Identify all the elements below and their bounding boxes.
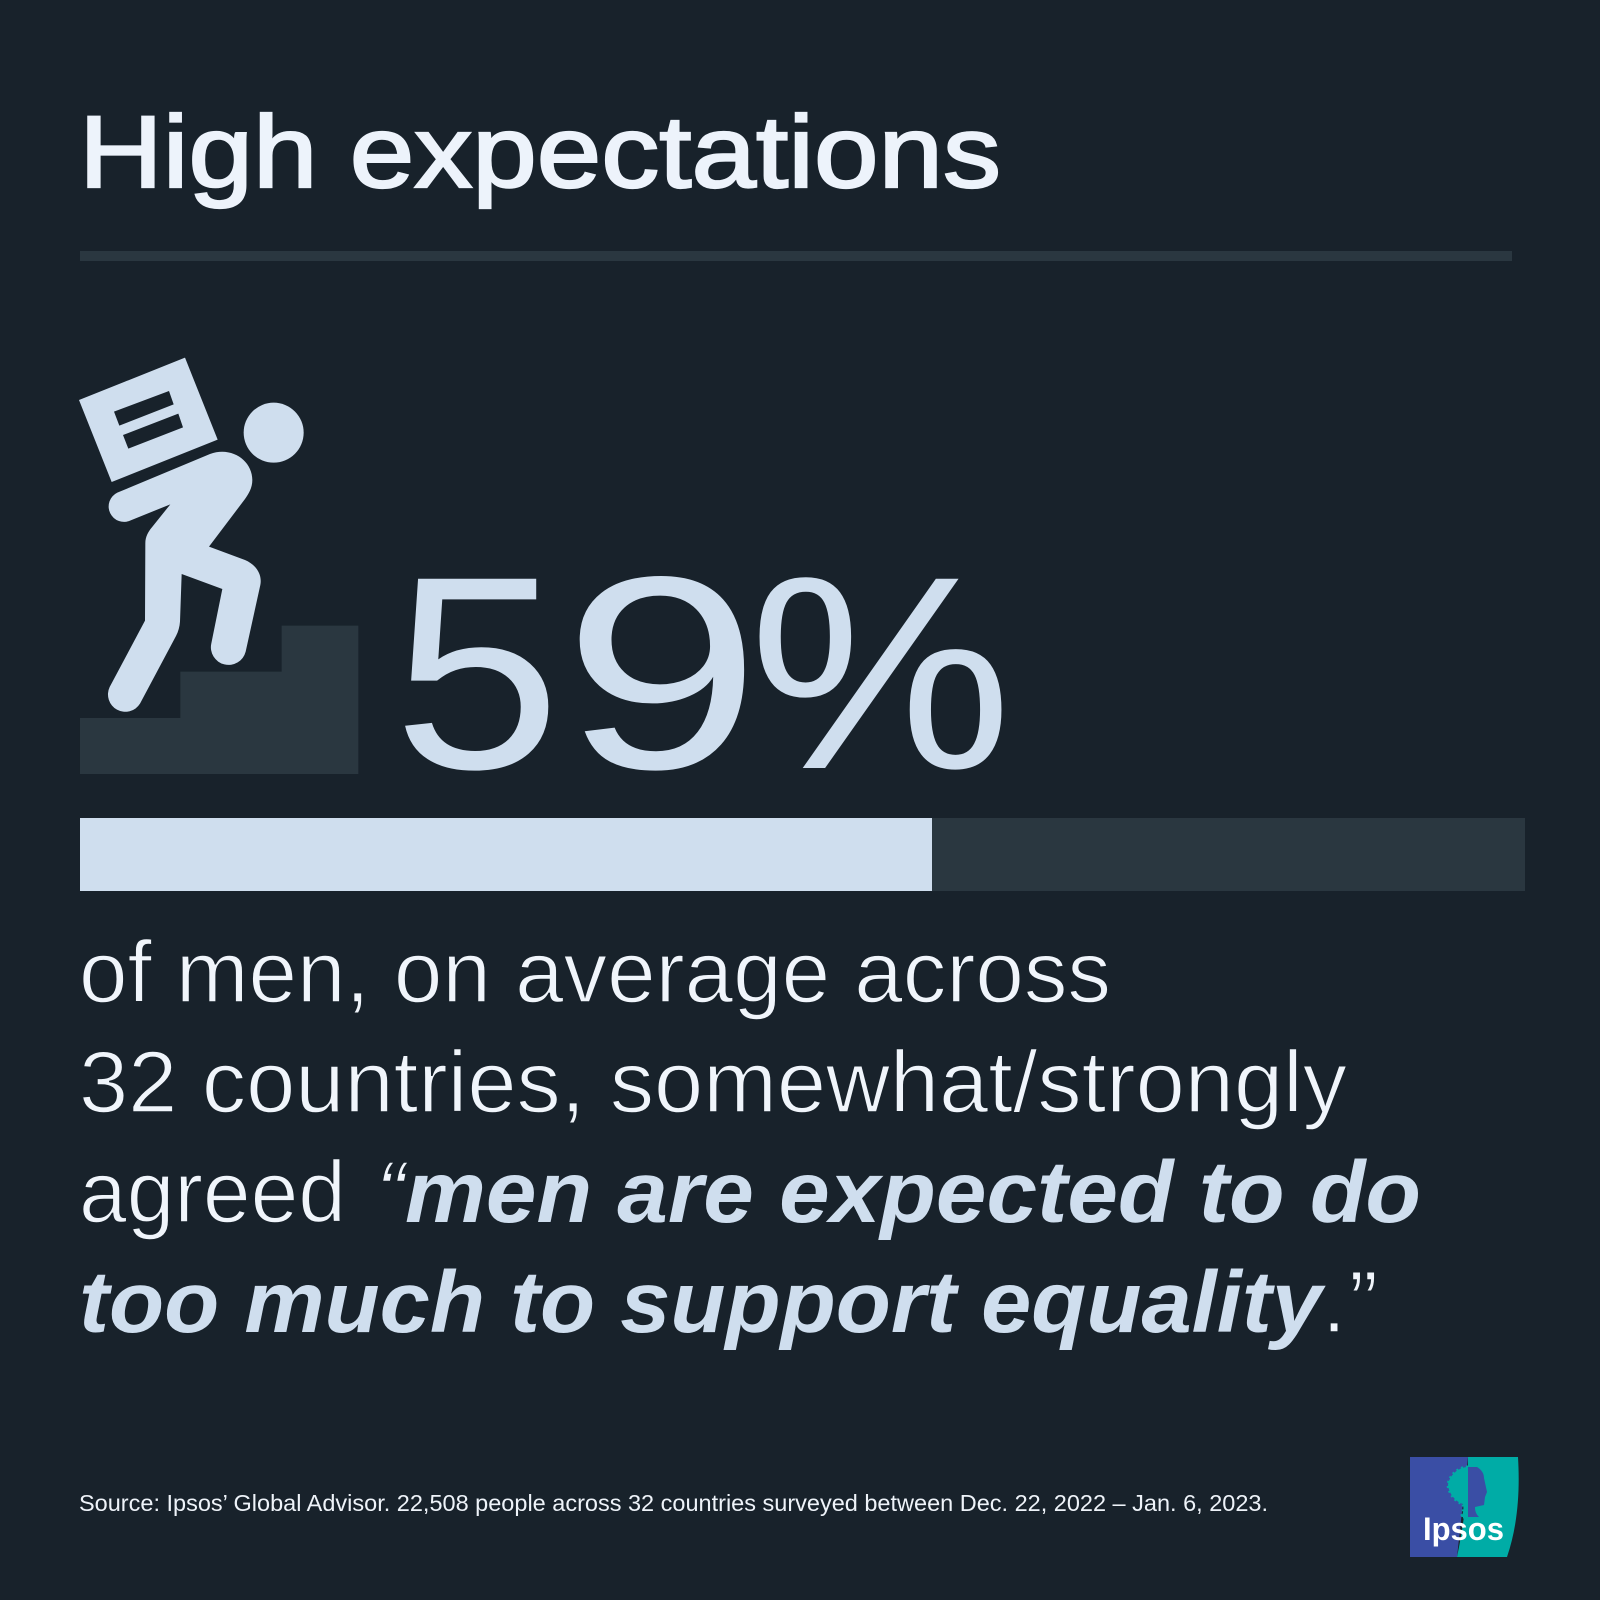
quote line 1: men are expected to do (405, 1144, 1421, 1241)
closing punctuation: ” (1349, 1254, 1378, 1351)
big percentage (393, 520, 1012, 827)
title: High expectations (79, 95, 1001, 209)
logo tree half (1448, 1467, 1468, 1517)
bar track (80, 818, 1525, 891)
progress bar (80, 818, 1525, 891)
closing punctuation: . (1322, 1254, 1346, 1351)
digit 9: 9 (563, 520, 761, 827)
head (244, 403, 304, 463)
closing punctuation (1322, 1254, 1378, 1351)
percent sign: % (749, 520, 1012, 827)
opening quote: “ (376, 1144, 409, 1241)
box on back (79, 358, 218, 482)
digit 5: 5 (393, 520, 561, 827)
logo teal shape (1457, 1457, 1519, 1557)
logo: Ipsos (1410, 1457, 1519, 1557)
source note: Source: Ipsos’ Global Advisor. 22,508 people across 32 countries surveyed between Dec. 22, 2022 – Jan. 6, 2023. (79, 1490, 1268, 1516)
quote line 2: too much to support equality (79, 1254, 1326, 1351)
line 2: 32 countries, somewhat/strongly (79, 1034, 1348, 1131)
body (108, 452, 261, 712)
icon: man carrying a box up stairs (79, 358, 358, 774)
line 3 lead: agreed (79, 1144, 346, 1241)
logo background (1410, 1457, 1468, 1557)
bar fill 59% (80, 818, 932, 891)
stairs (80, 626, 358, 774)
logo face half (1468, 1467, 1487, 1517)
logo wordmark: Ipsos (1423, 1511, 1504, 1547)
line 1: of men, on average across (79, 924, 1111, 1021)
statement text (79, 924, 1421, 1351)
